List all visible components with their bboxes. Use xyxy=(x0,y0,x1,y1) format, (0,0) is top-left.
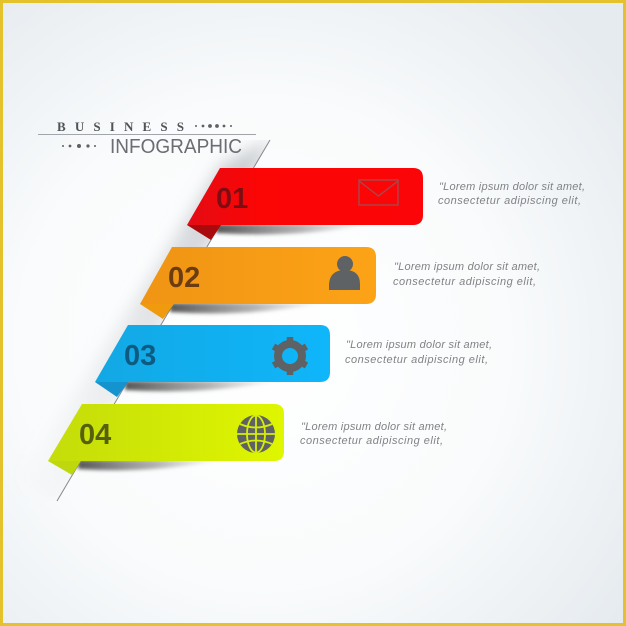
fold 01 xyxy=(187,225,221,240)
band 03 xyxy=(95,325,330,382)
band 04 xyxy=(48,404,284,461)
icon: envelope xyxy=(359,180,398,205)
dots: upper ornament xyxy=(195,124,232,128)
number 03: 03 xyxy=(124,340,156,372)
title: Business Infographic: BUSINESS xyxy=(57,119,184,134)
band 02 xyxy=(140,247,376,304)
number 01: 01 xyxy=(216,183,248,215)
text block 04: "Lorem ipsum dolor sit amet, xyxy=(301,421,447,433)
title: Business Infographic xyxy=(38,119,256,158)
title: Business Infographic: INFOGRAPHIC xyxy=(110,135,242,158)
shadow under ribbon 04 xyxy=(78,460,222,470)
shadow under ribbon 03 xyxy=(125,381,280,391)
fold 02 xyxy=(140,304,174,319)
band 01 xyxy=(187,168,423,225)
ribbon 03: blue xyxy=(95,325,330,397)
icon: gear xyxy=(274,337,306,375)
fold 03 xyxy=(95,382,128,397)
ribbon 04: green xyxy=(48,404,284,475)
shadow under ribbon 01 xyxy=(216,224,372,234)
text block 02: "Lorem ipsum dolor sit amet, xyxy=(394,261,540,273)
text block 03: "Lorem ipsum dolor sit amet, xyxy=(346,339,492,351)
shadow under ribbon 02 xyxy=(170,303,325,313)
text block 02: consectetur adipiscing elit, xyxy=(393,276,536,288)
fold 04 xyxy=(48,461,81,475)
number 04: 04 xyxy=(79,419,111,451)
dots: lower ornament xyxy=(62,144,96,148)
ribbon 02: orange xyxy=(140,247,376,319)
number 02: 02 xyxy=(168,262,200,294)
text block 04: consectetur adipiscing elit, xyxy=(300,435,443,447)
text block 03: consectetur adipiscing elit, xyxy=(345,354,488,366)
icon: person xyxy=(329,256,360,290)
text block 01: consectetur adipiscing elit, xyxy=(438,195,581,207)
diagonal fold line with soft shadow xyxy=(56,140,270,502)
text block 01: "Lorem ipsum dolor sit amet, xyxy=(439,181,585,193)
ribbon 01: red xyxy=(187,168,423,240)
icon: globe xyxy=(237,415,275,453)
